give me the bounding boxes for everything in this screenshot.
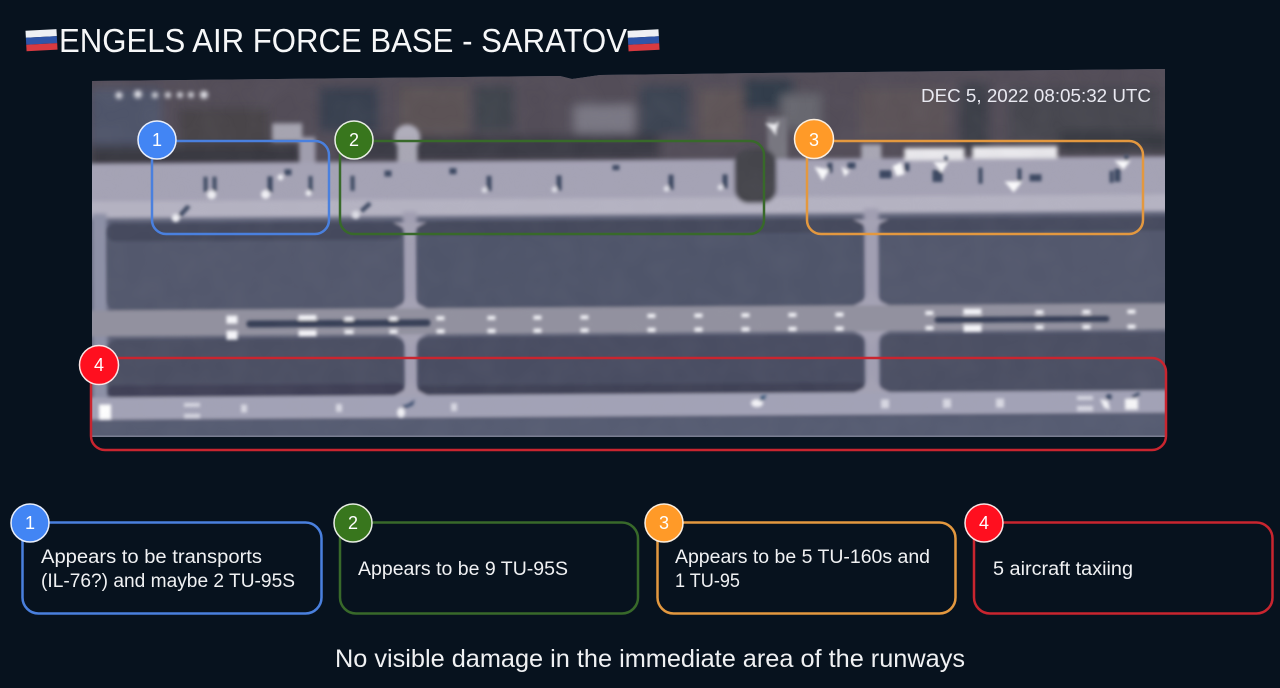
runway bbox=[81, 390, 1181, 420]
legend text 3: Appears to be 5 TU-160s and bbox=[675, 547, 930, 568]
legend marker 4 bbox=[965, 504, 1003, 542]
tree patch bbox=[734, 149, 777, 203]
title: ENGELS AIR FORCE BASE - SARATOV bbox=[59, 22, 627, 59]
top-left parked objects bbox=[115, 90, 208, 99]
upper grass panels bbox=[106, 236, 405, 308]
image callout box 2 bbox=[340, 141, 764, 234]
image marker 3 bbox=[794, 120, 834, 158]
legend text 2: Appears to be 9 TU-95S bbox=[358, 559, 568, 580]
image marker 3: 3 bbox=[809, 130, 819, 150]
apron aircraft group 1 bbox=[177, 169, 313, 217]
main taxiway bbox=[80, 303, 1181, 337]
image marker 4 bbox=[80, 346, 118, 384]
image marker 2: 2 bbox=[349, 130, 359, 150]
legend text 1: (IL-76?) and maybe 2 TU-95S bbox=[41, 571, 295, 592]
legend marker 4: 4 bbox=[979, 513, 989, 533]
junction flares bbox=[393, 219, 890, 396]
legend card 4 bbox=[965, 504, 1272, 614]
icon: Russian flag right bbox=[627, 29, 660, 51]
legend marker 3: 3 bbox=[659, 513, 669, 533]
legend text 4: 5 aircraft taxiing bbox=[993, 559, 1133, 580]
image marker 2 bbox=[335, 121, 373, 159]
image callout box 4 bbox=[91, 358, 1166, 450]
plane near north road bbox=[765, 121, 779, 136]
image bottom edge bbox=[92, 436, 1165, 437]
connecting taxiways bbox=[92, 213, 108, 439]
timestamp: DEC 5, 2022 08:05:32 UTC bbox=[921, 86, 1151, 106]
legend text 1: Appears to be transports bbox=[41, 547, 262, 568]
runway markings bbox=[99, 396, 1093, 420]
image marker 4: 4 bbox=[94, 355, 104, 375]
legend marker 2: 2 bbox=[348, 513, 358, 533]
taxiing aircraft bbox=[397, 399, 415, 418]
apron aircraft group 3 bbox=[827, 155, 1129, 186]
legend marker 3 bbox=[645, 504, 683, 542]
lower grass panels bbox=[108, 337, 404, 397]
apron aircraft group 2 bbox=[350, 164, 728, 213]
legend card 1 bbox=[11, 504, 322, 614]
legend marker 1 bbox=[11, 504, 49, 542]
taxiway dark strips bbox=[246, 319, 431, 328]
hangars bbox=[904, 148, 964, 160]
footer conclusion: No visible damage in the immediate area of the runways bbox=[335, 645, 965, 673]
legend marker 2 bbox=[334, 504, 372, 542]
legend card 2 bbox=[334, 504, 638, 614]
image callout box 3 bbox=[807, 141, 1143, 234]
taxiway markings bbox=[226, 308, 1136, 340]
legend text 3: 1 TU-95 bbox=[675, 571, 740, 592]
icon: Russian flag left bbox=[25, 29, 58, 51]
image callout box 1 bbox=[152, 141, 329, 234]
image marker 1: 1 bbox=[152, 130, 162, 150]
apron bbox=[92, 154, 1165, 204]
satellite image of the air base bbox=[92, 69, 1165, 437]
legend marker 1: 1 bbox=[25, 513, 35, 533]
image marker 1 bbox=[138, 121, 176, 159]
legend card 3 bbox=[645, 504, 956, 614]
